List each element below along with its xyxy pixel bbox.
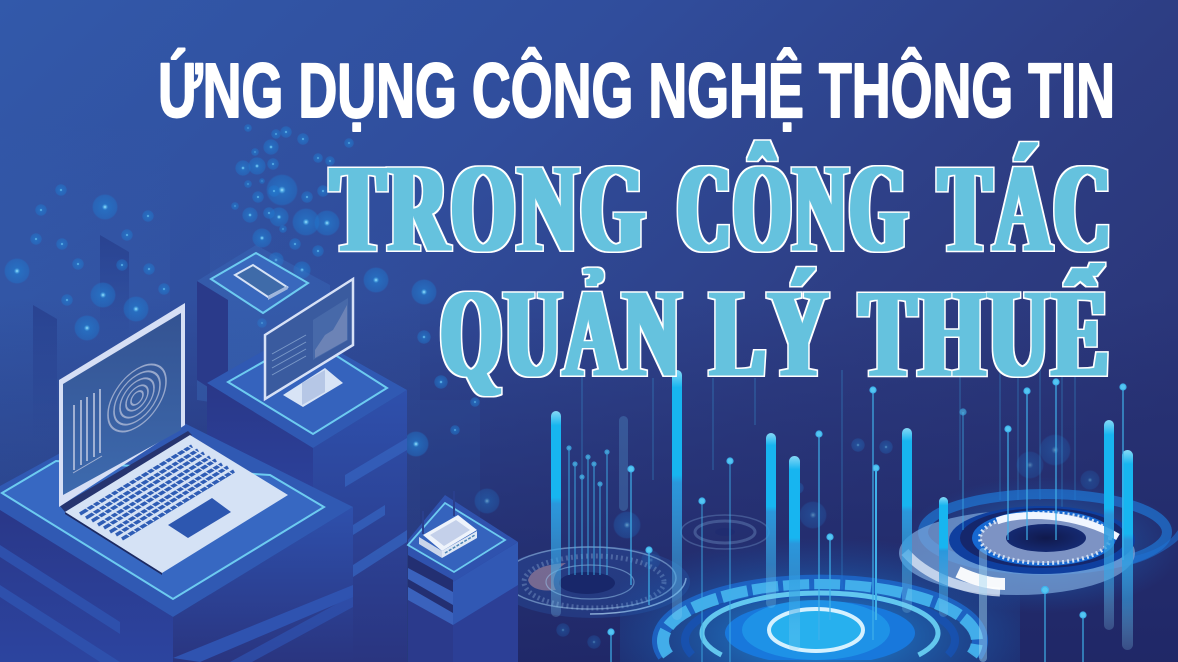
title: second line: TRONG [331,140,648,278]
glowing data beams [551,370,1133,662]
title: third line: LÝ [711,264,831,404]
tech ring: right, bright [899,477,1178,613]
platform block: router [408,495,518,662]
title: third line: QUẢN [441,264,683,404]
platform block: tablet and monitor tier [197,245,407,662]
rear data beams [582,370,1075,590]
icon: laptop [59,303,288,575]
tech ring: bottom centre, glowing [620,500,1020,662]
platform block: laptop tier [0,405,353,662]
laptop keyboard [80,445,234,539]
title: second line: CÔNG [678,140,910,278]
icon: tablet [235,265,288,300]
icon: desktop monitor [265,279,353,407]
title: third line [441,262,1112,404]
laptop hinge and base [60,431,288,575]
laptop trackpad [168,498,231,538]
tech ring: small, dim [681,515,769,549]
laptop screen [59,303,185,507]
tech ring: left, dim [496,546,690,618]
background particles [4,124,1100,649]
icon: router [419,491,477,558]
title: second line [331,140,1114,278]
